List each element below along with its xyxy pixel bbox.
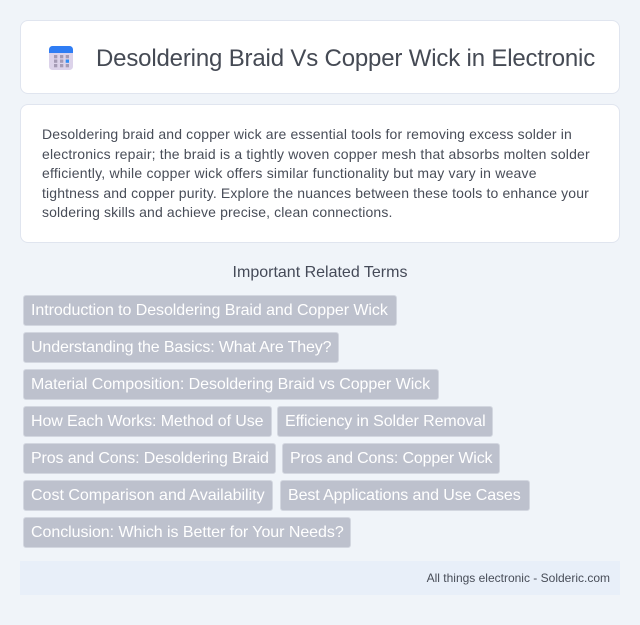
tag bbox=[280, 480, 530, 511]
intro text panel: soldering skills and achieve precise, clean connections. bbox=[42, 204, 392, 220]
tag: Best Applications and Use Cases bbox=[288, 487, 521, 504]
related terms tag list bbox=[23, 295, 530, 548]
title: Desoldering Braid Vs Copper Wick in Electronic bbox=[96, 45, 595, 72]
tag: Material Composition: Desoldering Braid vs Copper Wick bbox=[31, 376, 430, 393]
section heading: Important Related Terms bbox=[233, 264, 407, 281]
tag: Pros and Cons: Desoldering Braid bbox=[31, 450, 269, 467]
tag: Understanding the Basics: What Are They? bbox=[31, 339, 331, 356]
intro text panel: Desoldering braid and copper wick are essential tools for removing excess solder in bbox=[42, 126, 572, 142]
tag bbox=[23, 295, 397, 326]
tag: Efficiency in Solder Removal bbox=[285, 413, 486, 430]
tag bbox=[23, 480, 273, 511]
tag bbox=[23, 369, 439, 400]
tag bbox=[277, 406, 493, 437]
footer bar bbox=[20, 561, 620, 595]
tag: Conclusion: Which is Better for Your Needs? bbox=[31, 524, 344, 541]
intro text panel bbox=[20, 104, 620, 243]
tag: Introduction to Desoldering Braid and Copper Wick bbox=[31, 302, 388, 319]
header panel bbox=[20, 20, 620, 94]
tag bbox=[23, 332, 339, 363]
tag: Cost Comparison and Availability bbox=[31, 487, 265, 504]
tag: How Each Works: Method of Use bbox=[31, 413, 263, 430]
tag bbox=[23, 406, 272, 437]
intro text panel: tightness and copper purity. Explore the nuances between these tools to enhance your bbox=[42, 184, 589, 200]
intro text panel: electronics repair; the braid is a tightly woven copper mesh that absorbs molten solder bbox=[42, 146, 590, 162]
tag bbox=[23, 443, 276, 474]
tag bbox=[282, 443, 500, 474]
footer bar: All things electronic - Solderic.com bbox=[427, 571, 610, 585]
tag bbox=[23, 517, 351, 548]
intro text panel: efficiently, while copper wick offers similar functionality but may vary in weave bbox=[42, 165, 537, 181]
icon: calendar bbox=[49, 46, 73, 70]
tag: Pros and Cons: Copper Wick bbox=[290, 450, 492, 467]
